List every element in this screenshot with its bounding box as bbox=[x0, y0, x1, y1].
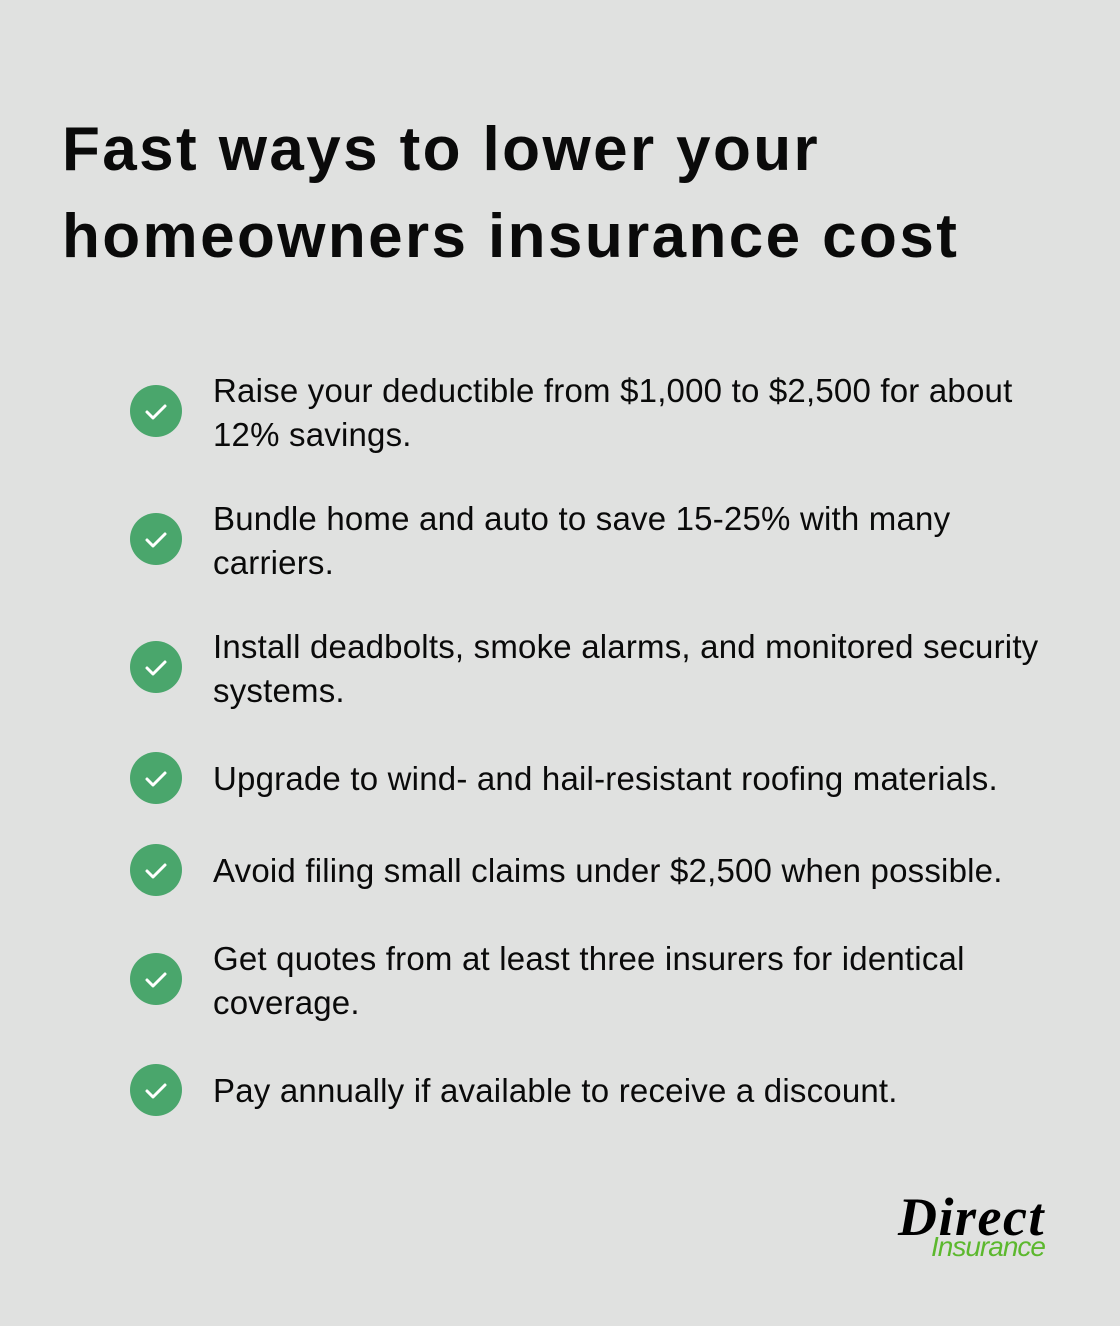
item 2: Bundle home and auto to save 15-25% with many bbox=[213, 500, 950, 537]
title bbox=[62, 115, 959, 271]
item 1: 12% savings. bbox=[213, 416, 412, 453]
item 6 bbox=[130, 940, 965, 1021]
item 4 bbox=[130, 752, 998, 804]
item 2 bbox=[130, 500, 950, 581]
title: Fast ways to lower your bbox=[62, 115, 820, 184]
item 5: Avoid filing small claims under $2,500 when possible. bbox=[213, 852, 1003, 889]
item 5 bbox=[130, 844, 1003, 896]
item 1: Raise your deductible from $1,000 to $2,500 for about bbox=[213, 372, 1012, 409]
item 3 bbox=[130, 628, 1038, 709]
item 4: Upgrade to wind- and hail-resistant roofing materials. bbox=[213, 760, 998, 797]
logo: Direct bbox=[898, 1187, 1045, 1247]
item 2: carriers. bbox=[213, 544, 334, 581]
item 3: systems. bbox=[213, 672, 345, 709]
item 3: Install deadbolts, smoke alarms, and monitored security bbox=[213, 628, 1038, 665]
item 7: Pay annually if available to receive a discount. bbox=[213, 1072, 898, 1109]
item 6: Get quotes from at least three insurers for identical bbox=[213, 940, 965, 977]
item 6: coverage. bbox=[213, 984, 360, 1021]
title: homeowners insurance cost bbox=[62, 202, 959, 271]
item 7 bbox=[130, 1064, 898, 1116]
logo: Insurance bbox=[931, 1231, 1045, 1262]
item 1 bbox=[130, 372, 1012, 453]
